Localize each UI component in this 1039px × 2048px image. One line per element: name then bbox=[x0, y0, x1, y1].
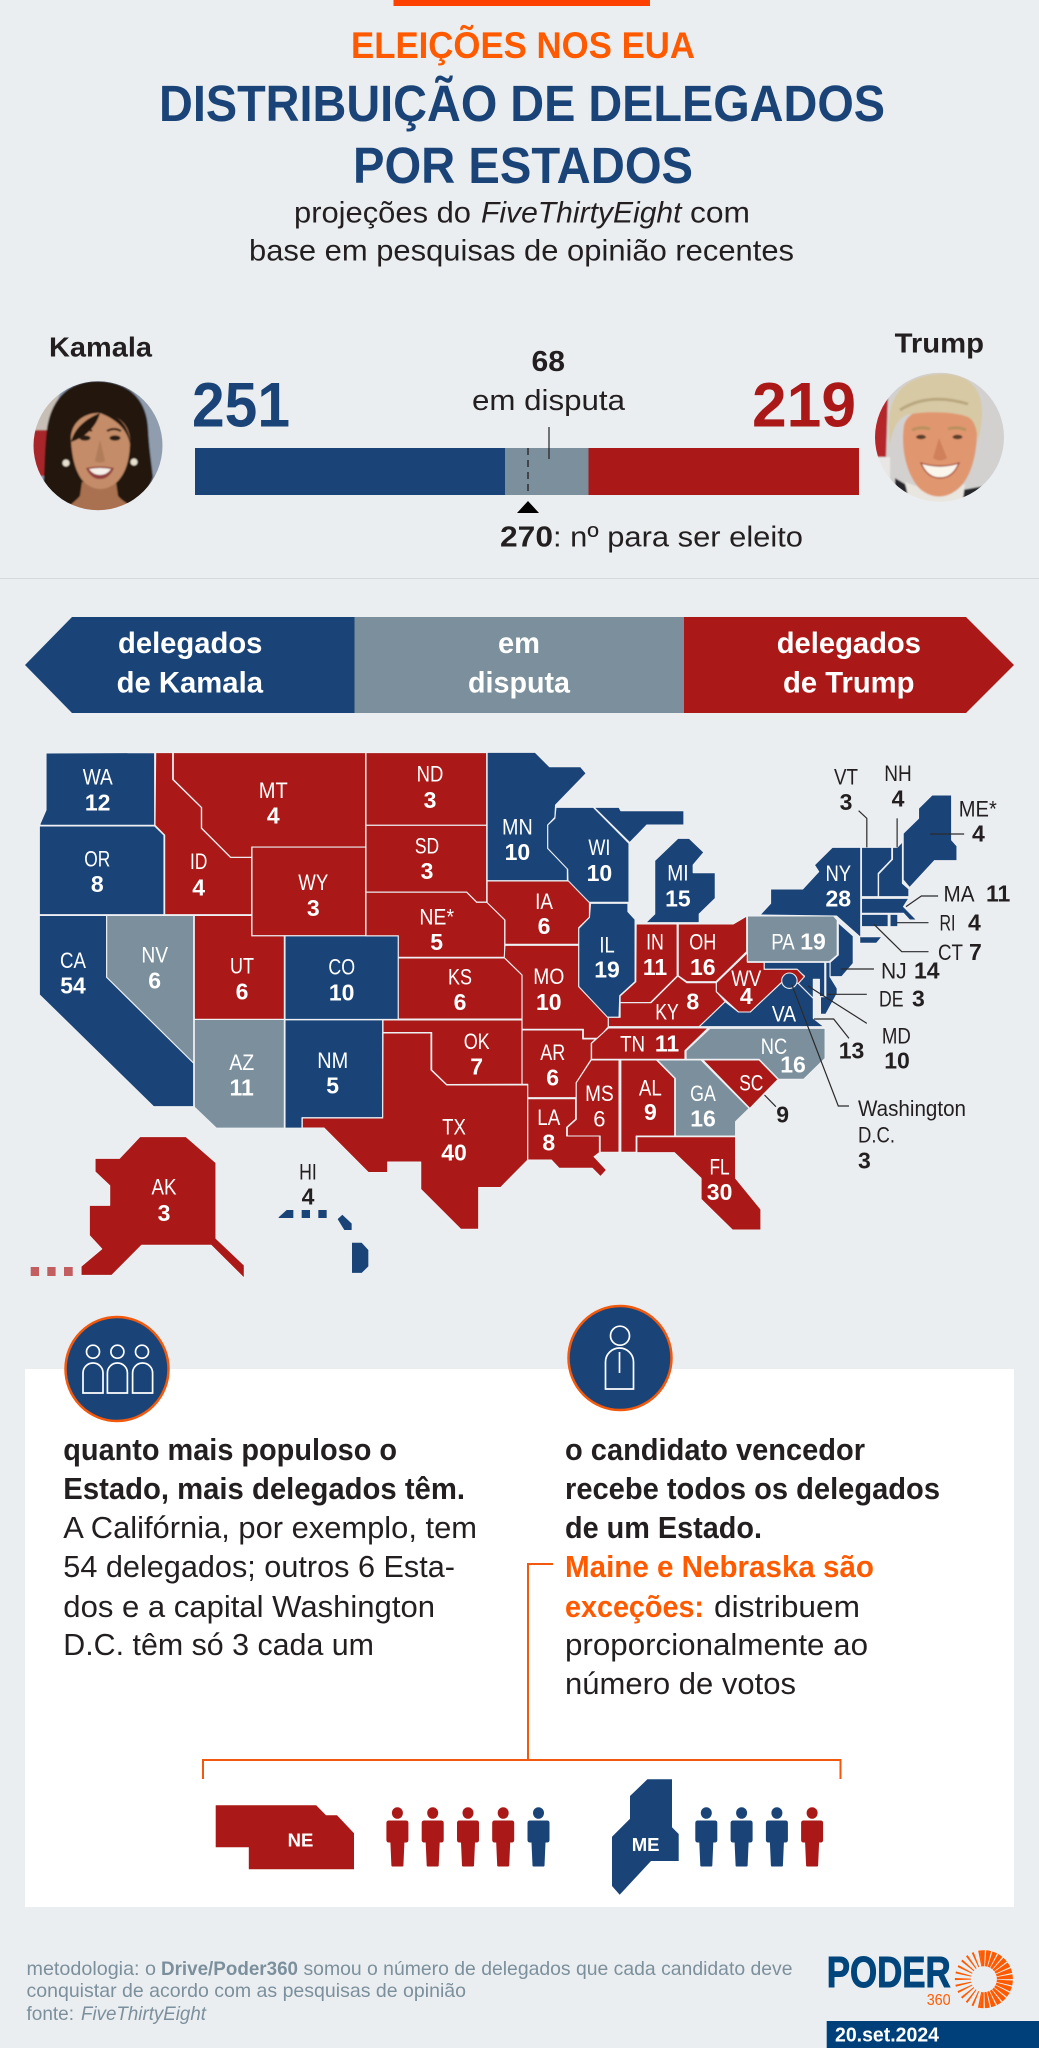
state: FL: FL bbox=[709, 1154, 730, 1179]
label: 270 para ser eleito: 270 bbox=[500, 522, 553, 554]
label: MA bbox=[944, 881, 1011, 907]
state: SD: 3 bbox=[421, 858, 433, 884]
state: KY bbox=[608, 976, 725, 1027]
text block: winner takes all: proporcionalmente ao bbox=[565, 1628, 868, 1662]
state: SC: SC bbox=[739, 1071, 763, 1096]
state: KY: KY bbox=[655, 999, 679, 1024]
shape: ME bbox=[612, 1779, 679, 1895]
subtitle: com bbox=[690, 197, 750, 230]
label: VT: 3 bbox=[840, 789, 852, 815]
state: OH: OH bbox=[689, 929, 716, 954]
state: NM bbox=[285, 1020, 383, 1128]
state: OK: OK bbox=[464, 1029, 490, 1054]
state: KS: KS bbox=[448, 964, 472, 990]
subtitle: base em pesquisas de opinião recentes bbox=[249, 235, 794, 268]
icon: three people bbox=[66, 1317, 168, 1421]
text block: winner takes all: recebe todos os delegados bbox=[565, 1472, 940, 1506]
state: HI: HI bbox=[299, 1160, 317, 1184]
footer: methodology and source: metodologia: o bbox=[26, 1958, 156, 1980]
label: NH bbox=[884, 761, 912, 812]
label: 68 em disputa: 68 bbox=[532, 346, 565, 378]
legend: delegados de Trump: de Trump bbox=[783, 667, 914, 700]
panel: explanation bbox=[25, 1306, 1014, 1907]
state: TX: TX bbox=[442, 1114, 466, 1139]
state: ID bbox=[155, 753, 252, 915]
state: MN bbox=[487, 752, 586, 881]
state: GA: GA bbox=[690, 1081, 716, 1106]
state: IA: 6 bbox=[538, 913, 550, 939]
candidate: Trump bbox=[875, 334, 1004, 502]
label: MA: MA bbox=[944, 882, 975, 907]
state: MA bbox=[861, 898, 917, 920]
state: OR: 8 bbox=[91, 871, 104, 897]
label: NJ: NJ bbox=[881, 959, 907, 984]
state: UT bbox=[194, 915, 284, 1019]
label: VA 13: 13 bbox=[839, 1037, 864, 1063]
state: MS: MS bbox=[585, 1081, 614, 1106]
top accent bar bbox=[394, 0, 650, 6]
state: NC: NC bbox=[761, 1034, 787, 1059]
state: HI: 4 bbox=[302, 1184, 315, 1210]
state: MO: 10 bbox=[536, 989, 562, 1015]
state: ND bbox=[366, 753, 487, 825]
state: SD bbox=[366, 825, 487, 902]
date tag: 20.set.2024 bbox=[835, 2025, 940, 2047]
footer: methodology and source: FiveThirtyEight bbox=[81, 2003, 208, 2025]
text block: winner takes all: de um Estado. bbox=[565, 1511, 762, 1545]
logo sunburst bbox=[963, 1958, 1005, 2000]
state: UT: 6 bbox=[236, 978, 248, 1004]
state: AR bbox=[522, 1030, 596, 1098]
label: DE bbox=[879, 986, 925, 1012]
state: NM: NM bbox=[317, 1048, 348, 1073]
label: VT: VT bbox=[834, 764, 858, 789]
state: NM: 5 bbox=[326, 1073, 339, 1099]
state: DE bbox=[820, 962, 837, 1014]
state: LA bbox=[528, 1099, 607, 1177]
shape: NE: NE bbox=[288, 1830, 313, 1851]
state: AK: 3 bbox=[158, 1200, 170, 1226]
state: IL: 19 bbox=[594, 957, 620, 983]
state: WA bbox=[40, 753, 155, 825]
label: RI: RI bbox=[940, 911, 956, 936]
state: IL: IL bbox=[599, 933, 615, 958]
state: HI bbox=[279, 1160, 368, 1273]
label: MA: 11 bbox=[986, 881, 1011, 907]
text block: winner takes all: Maine e Nebraska são bbox=[565, 1550, 874, 1584]
footer: methodology and source: fonte: bbox=[26, 2003, 74, 2025]
logo: Poder360: PODER bbox=[827, 1948, 951, 1997]
state: NE bbox=[366, 892, 505, 957]
label: VT bbox=[834, 764, 858, 815]
footer: methodology and source: Drive/Poder360 bbox=[161, 1958, 298, 1980]
label: 68 em disputa bbox=[472, 346, 626, 417]
state: AZ: 11 bbox=[230, 1074, 254, 1100]
state: MO: MO bbox=[533, 964, 564, 989]
state: NY bbox=[760, 847, 882, 943]
state: AZ bbox=[194, 1019, 284, 1128]
shape: NE bbox=[216, 1805, 354, 1869]
Aleutian islands bbox=[31, 1267, 73, 1276]
text block: winner takes all: distribuem bbox=[714, 1590, 860, 1624]
state: OH bbox=[678, 916, 747, 982]
kicker: ELEIÇÕES NOS EUA bbox=[351, 24, 695, 66]
label: CT bbox=[938, 939, 982, 965]
label: Washington D.C. bbox=[858, 1096, 966, 1173]
state: NY: NY bbox=[825, 861, 851, 886]
state: LA: 8 bbox=[542, 1130, 555, 1156]
external state labels bbox=[776, 761, 1011, 1173]
footer: methodology and source bbox=[26, 1958, 792, 2025]
state: NE: NE* bbox=[419, 904, 454, 930]
label: Washington D.C.: 3 bbox=[858, 1147, 871, 1173]
state: PA bbox=[747, 916, 837, 962]
state: OH: 16 bbox=[690, 954, 716, 980]
label: NJ: 14 bbox=[914, 958, 940, 984]
label: CT: 7 bbox=[969, 939, 982, 965]
label: ME bbox=[959, 797, 997, 847]
state: WY: 3 bbox=[307, 895, 320, 921]
state: NJ bbox=[830, 923, 853, 977]
label: 68 em disputa: em disputa bbox=[472, 385, 626, 417]
state: MS: 6 bbox=[593, 1107, 606, 1132]
progress bar bbox=[195, 427, 859, 495]
state: RI bbox=[890, 914, 898, 927]
state: MT: 4 bbox=[267, 802, 280, 828]
people: 3 blue 1 red bbox=[695, 1807, 823, 1866]
label: MD: MD bbox=[882, 1023, 911, 1048]
state: MT: MT bbox=[259, 778, 288, 803]
people: 4 red 1 blue bbox=[386, 1807, 550, 1866]
state: IA bbox=[487, 881, 589, 944]
text block: winner takes all: exceções: bbox=[565, 1590, 704, 1624]
state: ID: ID bbox=[190, 849, 207, 874]
photo: Trump portrait bbox=[875, 372, 1004, 502]
state: MI: 15 bbox=[665, 886, 691, 912]
state: AK: AK bbox=[152, 1175, 177, 1200]
date tag bbox=[827, 2021, 1039, 2048]
subtitle bbox=[249, 197, 794, 268]
label: RI bbox=[940, 910, 981, 936]
state: MO bbox=[504, 945, 608, 1038]
state: DC bbox=[782, 973, 797, 988]
state: OR: OR bbox=[84, 846, 110, 871]
state: AL bbox=[621, 1060, 675, 1152]
state: ME bbox=[903, 795, 957, 888]
total: Kamala 251: 251 bbox=[192, 371, 290, 441]
state: PA: 19 bbox=[800, 928, 826, 954]
state: CO: CO bbox=[328, 954, 355, 979]
subtitle: projeções do bbox=[294, 197, 471, 230]
text block: winner takes all: número de votos bbox=[565, 1667, 796, 1701]
state: AZ: AZ bbox=[229, 1050, 254, 1075]
state: NE: 5 bbox=[430, 929, 443, 955]
state: VT bbox=[861, 847, 892, 897]
state: IA: IA bbox=[535, 889, 553, 914]
label: 270 para ser eleito: : nº para ser eleito bbox=[553, 522, 803, 554]
state: PA: PA bbox=[771, 929, 795, 954]
map of US states bbox=[31, 752, 957, 1278]
leader lines for small states bbox=[764, 811, 964, 1107]
photo: Kamala portrait bbox=[30, 378, 166, 514]
state: NC bbox=[686, 1028, 825, 1079]
state: VA: VA bbox=[772, 1002, 796, 1027]
state: OK bbox=[383, 1020, 522, 1084]
state: CT bbox=[861, 914, 888, 927]
state: TX: 40 bbox=[441, 1140, 467, 1166]
state: AL: 9 bbox=[644, 1099, 657, 1125]
state: UT: UT bbox=[230, 954, 254, 979]
state: TX bbox=[302, 1033, 528, 1229]
label: DE: DE bbox=[879, 987, 904, 1012]
state: TN: 11 bbox=[655, 1031, 679, 1057]
legend: delegados de Kamala: de Kamala bbox=[117, 667, 264, 700]
total: Trump 219: 219 bbox=[752, 371, 856, 441]
label: MD: 10 bbox=[884, 1047, 910, 1073]
legend: em disputa: em bbox=[498, 627, 540, 660]
state: WV: 4 bbox=[740, 983, 753, 1009]
state: KS: 6 bbox=[454, 989, 466, 1015]
state: ND: ND bbox=[417, 762, 443, 787]
state: AR: AR bbox=[540, 1040, 565, 1065]
icon: single person bbox=[568, 1306, 672, 1410]
state: CA: 54 bbox=[60, 972, 86, 998]
legend: em disputa bbox=[354, 617, 684, 713]
state: TN: TN bbox=[620, 1032, 645, 1057]
state: NV: NV bbox=[141, 943, 168, 968]
state: VA bbox=[699, 982, 824, 1027]
state: KY: 8 bbox=[686, 988, 699, 1014]
state: TN bbox=[592, 1028, 708, 1059]
state: AK bbox=[81, 1137, 244, 1278]
state: IL bbox=[579, 903, 635, 1017]
text block: populous states: A Califórnia, por exemplo, tem bbox=[63, 1511, 477, 1545]
state: CA: CA bbox=[60, 948, 86, 973]
state: MN: 10 bbox=[505, 839, 530, 865]
text block: populous states bbox=[63, 1433, 477, 1662]
state: WY: WY bbox=[298, 870, 329, 895]
state: MT bbox=[173, 753, 366, 857]
label: NH: 4 bbox=[892, 786, 905, 812]
shape: ME: ME bbox=[632, 1834, 659, 1855]
state: WA: WA bbox=[83, 764, 113, 790]
example: Nebraska bbox=[216, 1805, 549, 1869]
state: SD: SD bbox=[415, 834, 439, 859]
state: IN bbox=[620, 924, 677, 1003]
legend: em disputa: disputa bbox=[468, 667, 571, 700]
state: AL: AL bbox=[639, 1076, 662, 1101]
state: WV: WV bbox=[731, 966, 762, 991]
text block: winner takes all: o candidato vencedor bbox=[565, 1433, 865, 1467]
label: Washington D.C.: Washington bbox=[858, 1096, 966, 1121]
name: Kamala: Kamala bbox=[49, 332, 152, 363]
main title line 2: POR ESTADOS bbox=[353, 137, 693, 194]
label: SC 9: 9 bbox=[776, 1102, 789, 1128]
state: FL: 30 bbox=[707, 1179, 732, 1205]
state: AR: 6 bbox=[546, 1065, 559, 1091]
state: WI: 10 bbox=[587, 860, 612, 886]
name: Trump: Trump bbox=[895, 328, 984, 359]
bracket connector bbox=[203, 1564, 840, 1779]
state: MI bbox=[594, 807, 715, 923]
state: MI: MI bbox=[667, 861, 689, 886]
state: NV: 6 bbox=[148, 968, 161, 994]
state: ND: 3 bbox=[424, 787, 436, 813]
text block: winner takes all bbox=[565, 1433, 940, 1701]
state: WI: WI bbox=[588, 835, 610, 860]
text block: populous states: Estado, mais delegados têm. bbox=[63, 1472, 465, 1506]
state: MN: MN bbox=[502, 814, 533, 839]
footer: methodology and source: conquistar de acordo com as pesquisas de opinião bbox=[26, 1980, 466, 2002]
state: CO: 10 bbox=[329, 980, 354, 1006]
label: NH: NH bbox=[884, 761, 912, 786]
footer: methodology and source: somou o número de delegados que cada candidato deve bbox=[304, 1958, 792, 1980]
state: NV bbox=[107, 915, 194, 1063]
state: SC bbox=[703, 1060, 778, 1108]
label: ME: ME* bbox=[959, 797, 997, 822]
subtitle: FiveThirtyEight bbox=[481, 197, 683, 230]
example: Maine bbox=[612, 1779, 823, 1895]
state: GA bbox=[657, 1060, 749, 1136]
state: ID: 4 bbox=[192, 874, 205, 900]
state: MS bbox=[567, 1060, 619, 1152]
main title line 1: DISTRIBUIÇÃO DE DELEGADOS bbox=[159, 74, 885, 132]
state: LA: LA bbox=[537, 1105, 561, 1130]
state: FL bbox=[637, 1137, 761, 1230]
state: GA: 16 bbox=[690, 1106, 716, 1132]
label: MD bbox=[882, 1023, 911, 1073]
text block: populous states: quanto mais populoso o bbox=[63, 1433, 397, 1467]
label: NJ bbox=[881, 958, 940, 984]
legend: delegados de Kamala: delegados bbox=[118, 627, 262, 660]
state: KS bbox=[398, 958, 522, 1019]
candidate: Kamala bbox=[30, 332, 166, 514]
label: RI: 4 bbox=[968, 910, 981, 936]
label: CT: CT bbox=[938, 940, 963, 965]
text block: populous states: D.C. têm só 3 cada um bbox=[63, 1628, 374, 1662]
marker: 270 triangle bbox=[517, 501, 539, 513]
logo: Poder360: 360 bbox=[927, 1992, 951, 2009]
label: DE: 3 bbox=[912, 986, 925, 1012]
legend: delegados de Trump: delegados bbox=[777, 627, 921, 660]
state: CO bbox=[285, 936, 398, 1019]
label: ME: 4 bbox=[972, 821, 985, 847]
state: NY: 28 bbox=[826, 886, 851, 912]
legend arrow banner bbox=[25, 617, 1014, 713]
state: IN: IN bbox=[646, 929, 664, 954]
text block: populous states: 54 delegados; outros 6 Esta- bbox=[63, 1550, 455, 1584]
state: WI bbox=[548, 807, 629, 902]
state: CA bbox=[39, 915, 194, 1107]
state: WA: 12 bbox=[85, 790, 110, 816]
state: MD bbox=[764, 962, 825, 998]
text block: populous states: dos e a capital Washington bbox=[63, 1590, 435, 1624]
label: Washington D.C.: D.C. bbox=[858, 1123, 895, 1148]
state: IN: 11 bbox=[643, 954, 667, 980]
state: OK: 7 bbox=[470, 1053, 483, 1079]
legend: delegados de Kamala bbox=[25, 617, 354, 713]
state: OR bbox=[39, 826, 164, 915]
state: NC: 16 bbox=[780, 1052, 806, 1078]
state: WV bbox=[716, 953, 804, 1012]
legend: delegados de Trump bbox=[684, 617, 1014, 713]
state: WY bbox=[252, 847, 366, 936]
title block bbox=[159, 24, 885, 268]
state: NH bbox=[879, 842, 909, 897]
